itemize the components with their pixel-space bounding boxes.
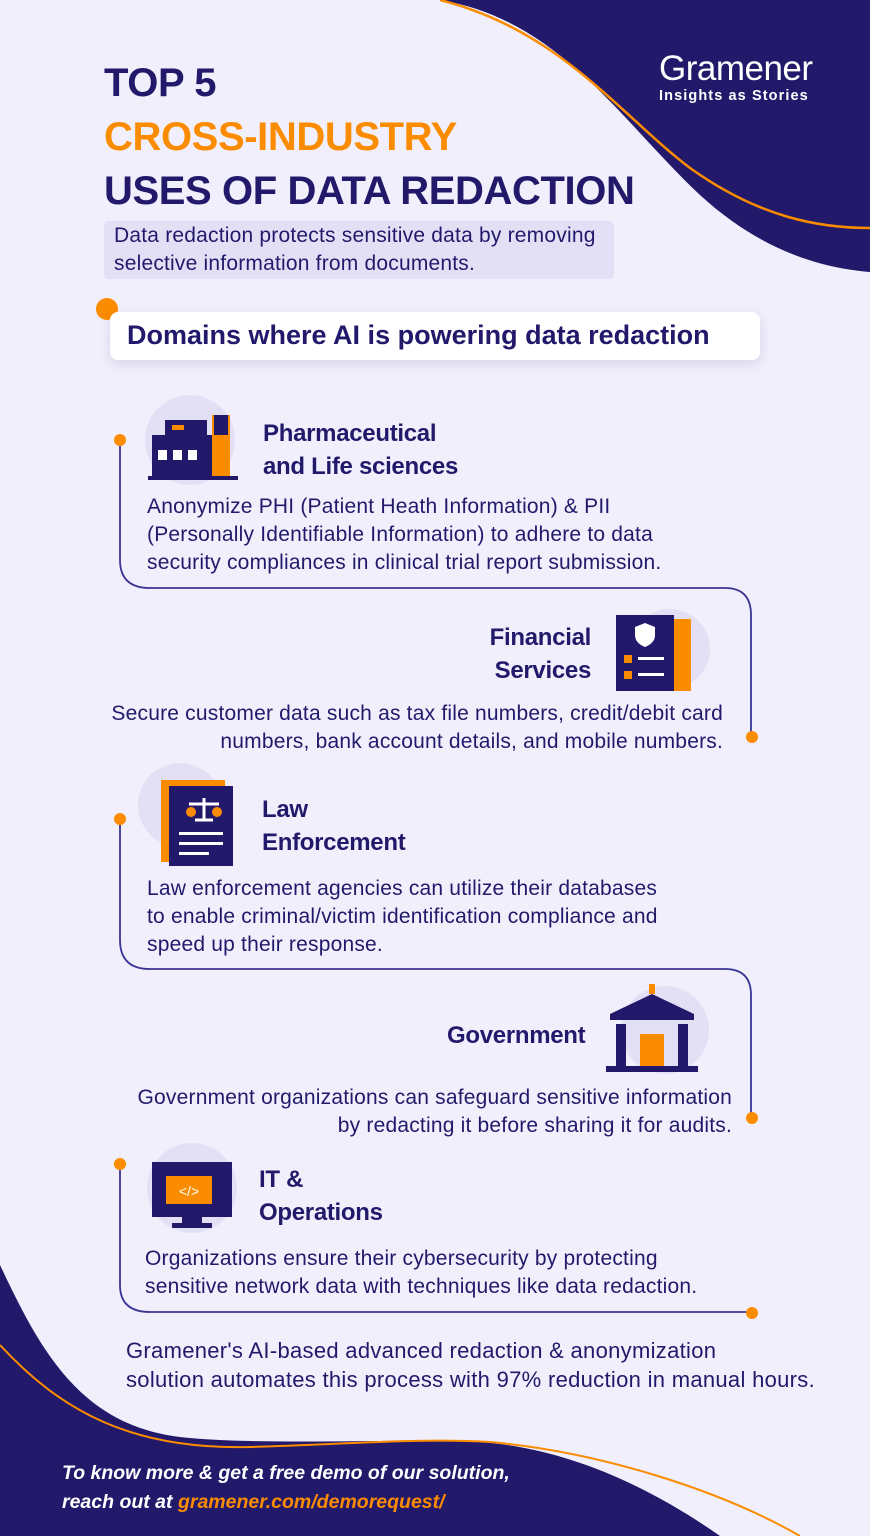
panel: IT [145,1143,697,1298]
heading: and Life sciences [263,453,458,480]
text [145,1247,697,1298]
title [104,61,634,213]
conclusion text: solution automates this process with 97% reduction in manual hours. [126,1367,815,1392]
text: Law enforcement agencies can utilize their databases [147,877,657,900]
heading: Law [262,796,308,823]
heading: Government [447,1022,585,1049]
title: CROSS-INDUSTRY [104,115,457,159]
text: sensitive network data with techniques like data redaction. [145,1275,697,1298]
text [138,1086,732,1137]
conclusion text [126,1338,815,1392]
heading [263,420,458,480]
panel: pharma [145,395,661,574]
icon: monitor code: </> [179,1183,199,1199]
text [147,877,658,956]
logo: Insights as Stories [659,88,809,104]
section heading [96,298,764,368]
subtitle: selective information from documents. [114,252,475,275]
text: Anonymize PHI (Patient Heath Information) & PII [147,495,610,518]
subtitle: Data redaction protects sensitive data by removing [114,224,596,247]
conclusion text: Gramener's AI-based advanced redaction & anonymization [126,1338,716,1363]
text [111,702,723,753]
heading: Enforcement [262,829,405,856]
icon: factory [145,395,238,485]
heading: Financial Services [490,624,591,684]
text: (Personally Identifiable Information) to adhere to data [147,523,653,546]
text: Government organizations can safeguard sensitive information [138,1086,732,1109]
text: to enable criminal/victim identification compliance and [147,905,658,928]
footer call to action [62,1462,510,1513]
heading [262,796,406,856]
heading: Pharmaceutical [263,420,436,447]
footer call to action: To know more & get a free demo of our solution, [62,1462,510,1484]
section heading: Domains where AI is powering data redaction [127,320,710,350]
logo: Gramener [659,49,813,88]
text: security compliances in clinical trial report submission. [147,551,661,574]
heading [259,1166,383,1226]
text [147,495,661,574]
panel: law [138,763,658,956]
title: TOP 5 [104,61,216,105]
title: USES OF DATA REDACTION [104,169,634,213]
icon: monitor code [147,1143,237,1233]
heading: IT & [259,1166,303,1193]
text: speed up their response. [147,933,383,956]
panel: government [138,984,732,1137]
icon: document shield [616,609,710,691]
text: numbers, bank account details, and mobile numbers. [220,730,723,753]
text: by redacting it before sharing it for audits. [338,1114,732,1137]
text: Organizations ensure their cybersecurity by protecting [145,1247,658,1270]
text: Secure customer data such as tax file numbers, credit/debit card [111,702,723,725]
icon: building [606,984,709,1074]
heading: Operations [259,1199,383,1226]
footer call to action: reach out at gramener.com/demorequest/ [62,1491,445,1513]
panel: financial [111,609,723,753]
icon: scales document [138,763,233,866]
subtitle [104,221,614,279]
